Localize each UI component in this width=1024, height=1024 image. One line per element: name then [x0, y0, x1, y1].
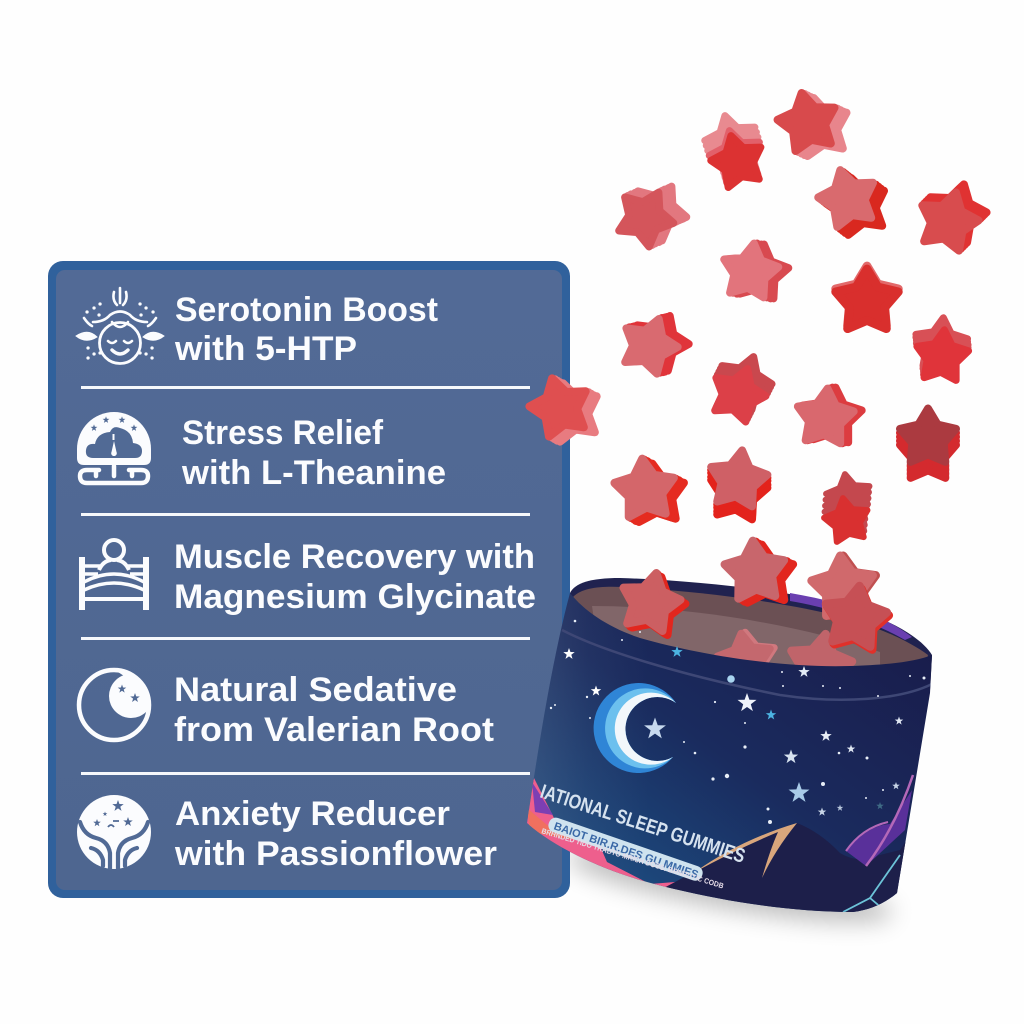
- stars on jar: [550, 620, 926, 824]
- gummy 16: [821, 470, 874, 543]
- tan ridge: [695, 823, 797, 878]
- gummy 13: [524, 371, 605, 444]
- jar opening: [570, 578, 932, 690]
- gummy 3: [773, 87, 854, 158]
- text: muscle recovery: [174, 538, 536, 616]
- text: anxiety reducer: Anxiety Reducer: [175, 795, 450, 833]
- cyan lines: [843, 855, 900, 915]
- text: anxiety reducer: with Passionflower: [174, 835, 497, 873]
- icon: cloud under starry dome: [77, 412, 151, 483]
- gummy 18: [616, 567, 690, 637]
- icon: crescent moon with stars: [79, 670, 153, 740]
- gummy 6: [720, 240, 791, 300]
- text: anxiety reducer: [174, 795, 497, 873]
- icon: serene face with leaves: [76, 288, 164, 364]
- gummy 4: [813, 163, 893, 238]
- jar body: [520, 593, 940, 930]
- gummy 10: [705, 348, 778, 425]
- text: muscle recovery: Magnesium Glycinate: [174, 578, 536, 616]
- gummy jar: [520, 87, 992, 930]
- text: serotonin: [174, 291, 438, 368]
- gummies inside jar: [715, 629, 856, 697]
- jar label text: BAIOT BIR.R.DES GU MMIES: [552, 821, 700, 881]
- gummy 17: [723, 539, 795, 603]
- text: natural sedative: Natural Sedative: [174, 671, 457, 709]
- gummy 19: [810, 553, 879, 617]
- panel: benefits list: [48, 261, 570, 898]
- jar label text: IATIONAL SLEEP GUMMIES: [537, 781, 748, 868]
- icon: cupped hands with stars: [77, 795, 151, 869]
- gummy 1: [610, 174, 696, 252]
- rim groove: [562, 630, 932, 700]
- text: natural sedative: from Valerian Root: [174, 711, 494, 749]
- text: stress relief: with L-Theanine: [181, 454, 446, 492]
- gummy 7: [836, 266, 898, 329]
- gummy 5: [914, 177, 992, 253]
- text: natural sedative: [174, 671, 494, 749]
- falling gummies: [524, 87, 992, 651]
- gummy 9: [913, 316, 970, 381]
- gummy 15: [706, 446, 770, 521]
- text: muscle recovery: Muscle Recovery with: [174, 538, 535, 576]
- can shadow: [563, 833, 897, 937]
- text: serotonin: Serotonin Boost: [175, 291, 438, 329]
- gummy 11: [795, 385, 864, 444]
- icon: person in bed: [82, 540, 146, 610]
- gummy 2: [700, 109, 769, 190]
- gummy 8: [615, 306, 696, 377]
- text: serotonin: with 5-HTP: [174, 330, 357, 368]
- gummy 12: [900, 408, 956, 478]
- gummy 20: [821, 582, 892, 651]
- jar label text: BRHNDED TIDO TRADTO MRICH DOSS: BRNRUTIC CODB: [540, 826, 725, 891]
- text: stress relief: [181, 414, 446, 492]
- text: stress relief: Stress Relief: [182, 414, 384, 452]
- gummy 14: [613, 456, 687, 523]
- moon logo: [594, 683, 676, 773]
- pink and purple art, left: [527, 778, 675, 888]
- purple ridge: [846, 790, 912, 866]
- mountain: [666, 823, 906, 912]
